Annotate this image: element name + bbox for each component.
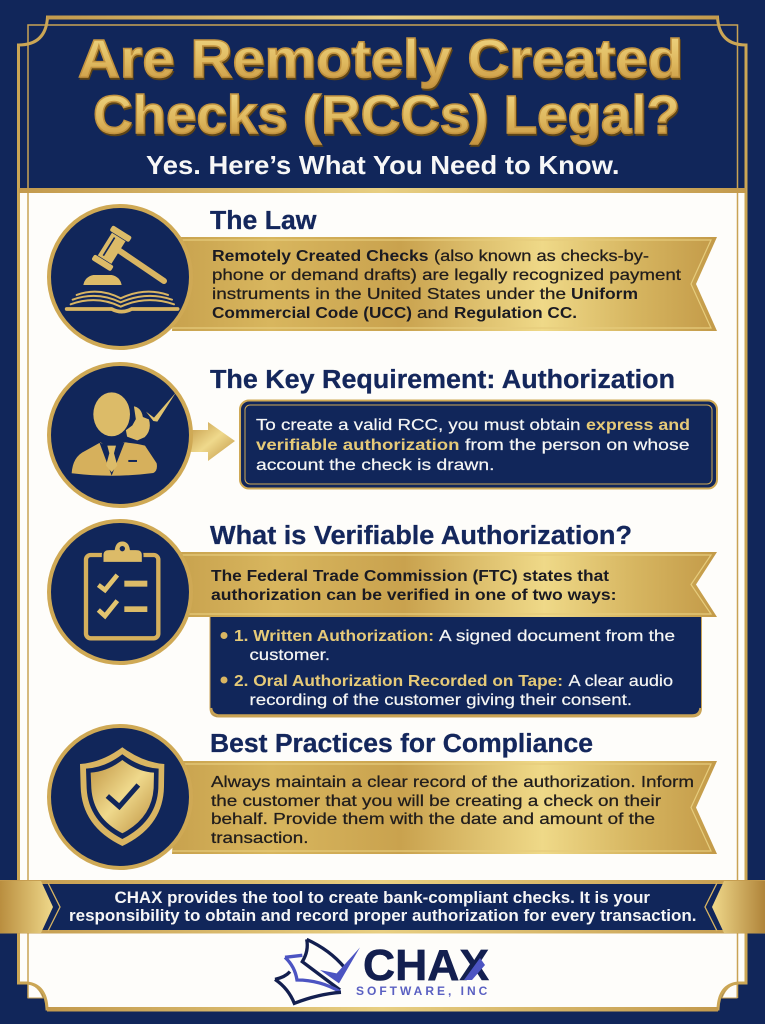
text: the law: Regulation CC. <box>454 305 577 322</box>
title: Checks (RCCs) Legal? <box>93 85 680 145</box>
box: two ways list: A clear audio <box>568 673 673 690</box>
heading: best practices: Best Practices for Compliance <box>210 730 593 758</box>
ribbon: best practices: the customer that you will be creating a check on their <box>211 793 662 810</box>
box: two ways list: 2. Oral Authorization Recorded on Tape: <box>234 673 563 690</box>
logo tagline: SOFTWARE, INC <box>356 984 490 998</box>
section: key requirement <box>49 364 717 506</box>
text: the law: Uniform <box>571 286 638 303</box>
box: two ways list: 1. Written Authorization: <box>234 628 434 645</box>
ribbon: FTC: The Federal Trade Commission (FTC) states that <box>211 568 610 585</box>
box: two ways list: customer. <box>250 647 330 664</box>
ribbon: FTC <box>178 552 717 617</box>
section: the law <box>49 206 717 348</box>
arrow <box>188 422 235 461</box>
banner: responsibility notice <box>0 880 765 934</box>
logo: CHAX Software, Inc <box>275 939 490 1003</box>
text: the law: Remotely Created Checks <box>212 248 429 265</box>
text: the law: Commercial Code (UCC) <box>212 305 412 322</box>
box: authorization requirement: verifiable authorization <box>256 437 460 454</box>
ribbon: best practices: Always maintain a clear record of the authorization. Inform <box>211 774 694 791</box>
text: the law: phone or demand drafts) are legally recognized payment <box>212 267 682 284</box>
ribbon: the law <box>172 237 717 331</box>
ribbon: best practices: behalf. Provide them with the date and amount of the <box>211 811 655 828</box>
box: authorization requirement <box>240 400 717 488</box>
banner: responsibility notice: CHAX provides the tool to create bank-compliant checks. It is your <box>114 889 651 907</box>
box: two ways list: A signed document from the <box>439 628 675 645</box>
title <box>78 29 683 145</box>
ribbon: best practices: transaction. <box>211 830 308 847</box>
white content panel <box>19 191 746 1009</box>
text: the law: instruments in the United States under the <box>212 286 566 303</box>
logo mark <box>275 939 360 1003</box>
box: authorization requirement: express and <box>586 417 690 434</box>
ribbon: best practices <box>172 761 717 854</box>
text: the law: (also known as checks-by- <box>434 248 649 265</box>
icon: shield with check <box>49 726 191 868</box>
ribbon: FTC: authorization can be verified in one of two ways: <box>211 587 616 604</box>
icon: person on phone with check <box>49 364 191 506</box>
section: verifiable authorization <box>49 521 717 717</box>
section: best practices <box>49 726 717 868</box>
box: two ways list: recording of the customer giving their consent. <box>250 692 632 709</box>
text: the law: and <box>417 305 448 322</box>
heading: the law: The Law <box>210 207 317 235</box>
text: the law <box>212 248 682 322</box>
box: authorization requirement: from the person on whose <box>465 437 690 454</box>
subtitle: Yes. Here’s What You Need to Know. <box>146 150 620 180</box>
box: authorization requirement: account the check is drawn. <box>256 457 494 474</box>
box: authorization requirement: To create a valid RCC, you must obtain <box>256 417 580 434</box>
icon: gavel and book <box>49 206 191 348</box>
icon: clipboard checklist <box>49 521 191 663</box>
logo wordmark: CHAX <box>363 941 489 990</box>
box: two ways list <box>210 610 702 717</box>
heading: verifiable authorization: What is Verifiable Authorization? <box>210 522 632 550</box>
title: Are Remotely Created <box>78 29 683 89</box>
corner tab bottom left <box>28 984 43 998</box>
corner tab bottom right <box>722 984 737 998</box>
heading: key requirement: The Key Requirement: Authorization <box>210 366 675 394</box>
banner: responsibility notice: responsibility to obtain and record proper authorization for every transaction. <box>69 907 696 925</box>
